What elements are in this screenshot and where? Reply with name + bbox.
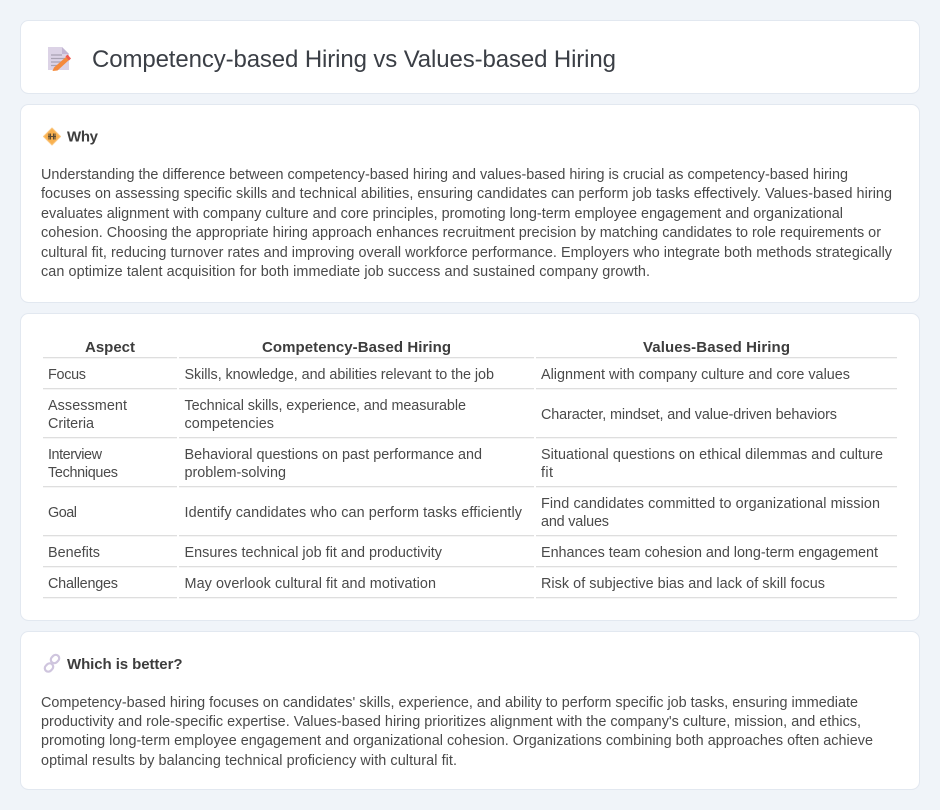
row: interview techniques: Situational questions on ethical dilemmas and culture: [541, 447, 883, 463]
row: interview techniques: problem-solving: [184, 465, 286, 481]
row: benefits: Enhances team cohesion and long-term engagement: [541, 545, 878, 561]
row: assessment criteria: Character, mindset, and value-driven behaviors: [541, 407, 837, 423]
row: assessment criteria: Criteria: [48, 416, 94, 432]
table header row: Aspect: [85, 339, 135, 356]
row: challenges: May overlook cultural fit and motivation: [184, 576, 436, 592]
row: benefits: Ensures technical job fit and productivity: [184, 545, 443, 561]
text block: why paragraph: evaluates alignment with company culture and core principles, promoting long-term employee engagement and organizational: [41, 206, 843, 222]
heading: why: Why: [67, 128, 99, 146]
panel: comparison table: [20, 314, 920, 620]
row: challenges: Challenges: [48, 576, 118, 592]
row: interview techniques: Interview: [48, 447, 103, 463]
text block: which is better paragraph: productivity and role-specific expertise. Values-based hiring prioritizes alignment with the company's culture, mission, and ethics,: [41, 714, 861, 730]
icon: document with pencil: [48, 47, 71, 71]
title: Competency-based Hiring vs Values-based Hiring: [92, 46, 616, 73]
row: interview techniques: [48, 447, 883, 481]
text block: why paragraph: cultural fit, reducing turnover rates and improving overall workforce performance. Employers who integrate both methods strategically: [41, 245, 893, 261]
row: assessment criteria: [48, 398, 837, 432]
panel: which is better: [20, 632, 920, 790]
row: interview techniques: Behavioral questions on past performance and: [184, 447, 482, 463]
row: benefits: [48, 545, 878, 561]
row: assessment criteria: Assessment: [48, 398, 127, 414]
text block: which is better paragraph: Competency-based hiring focuses on candidates' skills, experience, and ability to perform specific job tasks, ensuring immediate: [41, 695, 858, 711]
row: assessment criteria: Technical skills, experience, and measurable: [184, 398, 466, 414]
row: challenges: Risk of subjective bias and lack of skill focus: [541, 576, 825, 592]
row: benefits: Benefits: [48, 545, 100, 561]
table header row: Competency-Based Hiring: [262, 339, 451, 356]
row: interview techniques: fit: [541, 465, 553, 481]
row: challenges: [48, 576, 825, 592]
row: goal: Goal: [48, 505, 77, 521]
panel: why: [20, 104, 920, 302]
table header row: Values-Based Hiring: [643, 339, 790, 356]
text block: which is better paragraph: optimal results by balancing technical proficiency with cultural fit.: [41, 753, 457, 769]
text block: why paragraph: focuses on assessing specific skills and technical abilities, ensuring candidates can perform job tasks effectively. Values-based hiring: [41, 186, 892, 202]
row: focus: Alignment with company culture and core values: [541, 367, 850, 383]
row: goal: Identify candidates who can perform tasks efficiently: [184, 505, 523, 521]
row: goal: and values: [541, 514, 609, 530]
table header row: [85, 339, 790, 356]
row: focus: Focus: [48, 367, 86, 383]
row: goal: [48, 496, 880, 530]
text block: which is better paragraph: [41, 695, 873, 769]
heading: which is better: Which is better?: [67, 656, 182, 673]
text block: which is better paragraph: promoting long-term employee engagement and organizational cohesion. Organizations combining both approaches often achieve: [41, 733, 873, 749]
icon: chain link: [43, 653, 61, 673]
row: focus: [48, 367, 850, 383]
row: assessment criteria: competencies: [184, 416, 274, 432]
row: interview techniques: Techniques: [48, 465, 118, 481]
text block: why paragraph: [41, 167, 893, 280]
icon: diamond sign: [44, 128, 60, 145]
header panel: [20, 20, 920, 94]
row: focus: Skills, knowledge, and abilities relevant to the job: [184, 367, 494, 383]
text block: why paragraph: cohesion. Choosing the appropriate hiring approach enhances recruitment precision by matching candidates to role requirements or: [41, 225, 881, 241]
text block: why paragraph: Understanding the difference between competency-based hiring and values-based hiring is crucial as competency-based hiring: [41, 167, 848, 183]
row: goal: Find candidates committed to organizational mission: [541, 496, 880, 512]
text block: why paragraph: can optimize talent acquisition for both immediate job success and sustained company growth.: [41, 264, 650, 280]
